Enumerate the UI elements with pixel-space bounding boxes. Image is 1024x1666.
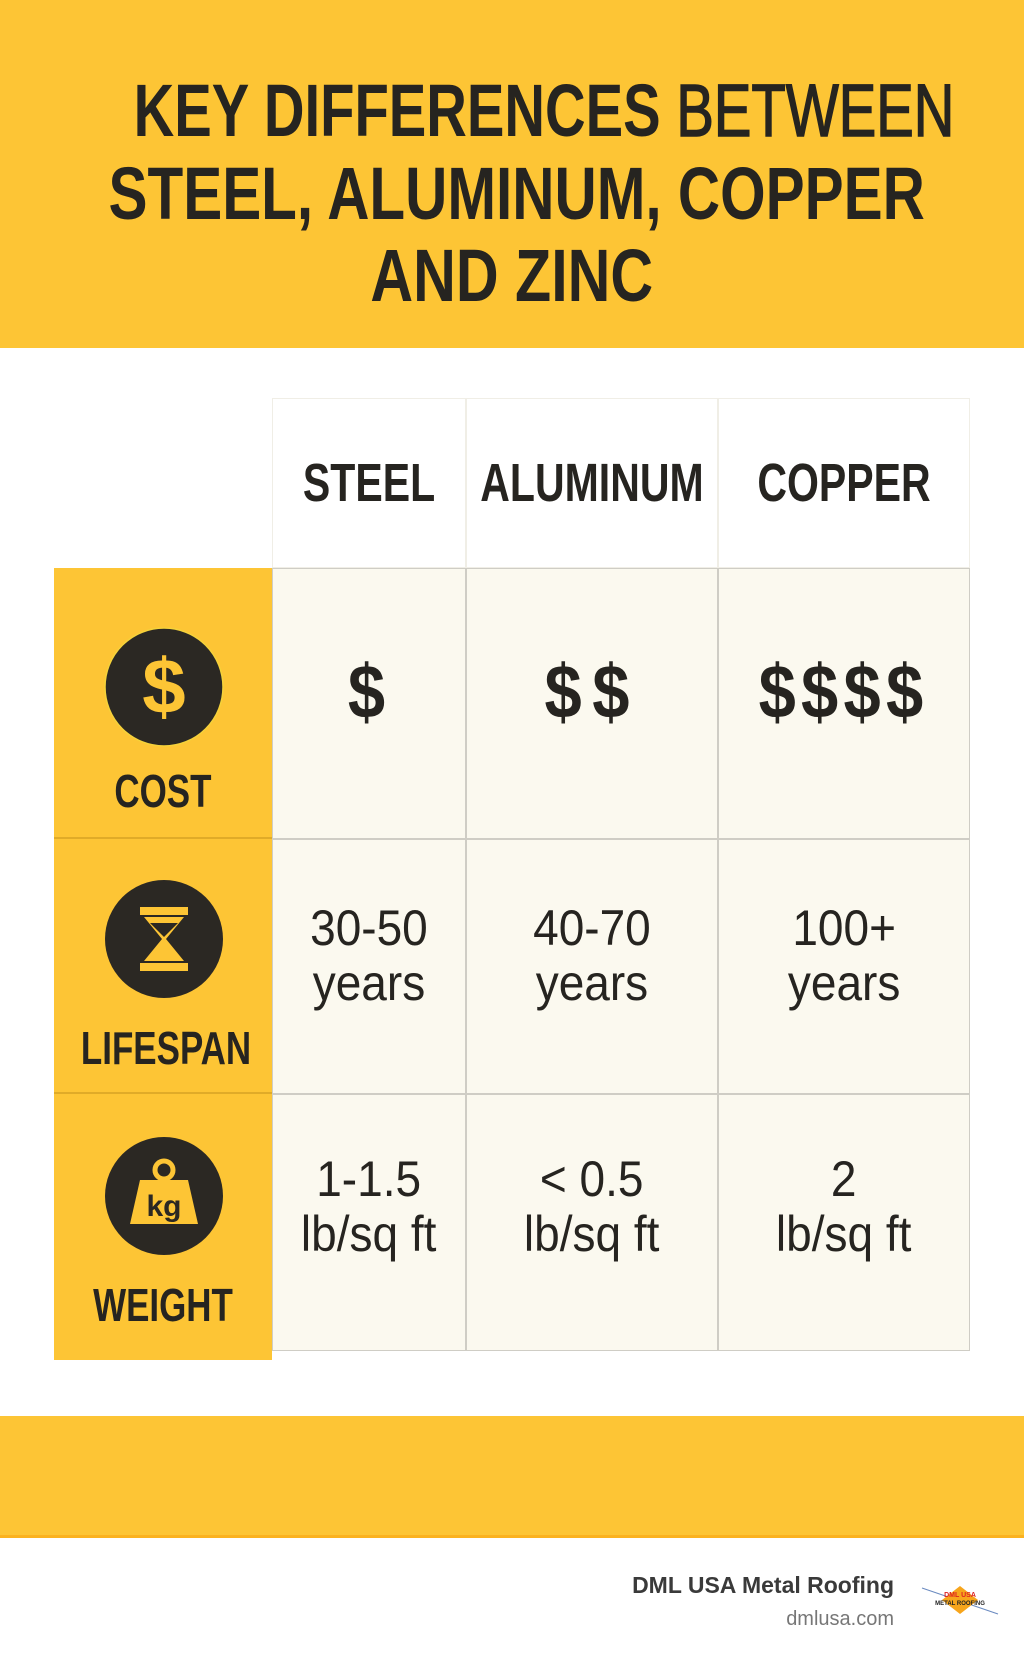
- header: copper: COPPER: [757, 453, 931, 513]
- cost: steel: [272, 568, 466, 839]
- title text: STEEL, ALUMINUM, COPPER: [108, 152, 925, 235]
- header: steel: [272, 398, 466, 568]
- lifespan: copper: years: [788, 954, 900, 1010]
- weight: copper: [718, 1094, 970, 1351]
- weight: copper: lb/sq ft: [776, 1206, 912, 1262]
- weight: steel: [272, 1094, 466, 1351]
- weight label: WEIGHT: [93, 1279, 233, 1331]
- icon: dollar: $: [142, 642, 186, 730]
- header: copper: [718, 398, 970, 568]
- icon: kg weight: kg: [146, 1190, 182, 1223]
- title banner: [0, 0, 1024, 348]
- header: steel: STEEL: [303, 453, 435, 513]
- lifespan: aluminum: [466, 839, 718, 1094]
- weight: aluminum: [466, 1094, 718, 1351]
- title text: KEY DIFFERENCES BETWEEN: [134, 69, 954, 152]
- lifespan: steel: [272, 839, 466, 1094]
- cost: aluminum: [466, 568, 718, 839]
- weight: aluminum: lb/sq ft: [524, 1206, 660, 1262]
- lifespan: aluminum: years: [536, 954, 648, 1010]
- lifespan: copper: 100+: [792, 900, 896, 956]
- cost: aluminum: $$: [544, 650, 640, 735]
- logo: METAL ROOFING: [935, 1601, 985, 1607]
- lifespan label: LIFESPAN: [81, 1022, 251, 1074]
- icon: kg weight: [105, 1137, 223, 1255]
- cost: copper: [718, 568, 970, 839]
- cost: steel: $: [348, 650, 390, 735]
- lifespan: steel: 30-50: [310, 900, 428, 956]
- label: weight: [54, 1094, 272, 1360]
- cost: copper: $$$$: [759, 650, 929, 735]
- lifespan: copper: [718, 839, 970, 1094]
- footer brand text: DML USA Metal Roofing: [632, 1572, 894, 1598]
- title text: AND ZINC: [371, 234, 653, 317]
- logo: DML USA: [944, 1592, 976, 1599]
- cost label: COST: [114, 765, 212, 817]
- icon: hourglass: [105, 880, 223, 998]
- lifespan: aluminum: 40-70: [533, 900, 651, 956]
- header: aluminum: [466, 398, 718, 568]
- bottom band: [0, 1416, 1024, 1538]
- label: cost: [54, 568, 272, 839]
- weight: aluminum: < 0.5: [540, 1150, 644, 1206]
- logo: [922, 1586, 998, 1614]
- label: lifespan: [54, 839, 272, 1094]
- footer url: dmlusa.com: [786, 1608, 894, 1630]
- weight: steel: 1-1.5: [317, 1150, 421, 1206]
- weight: steel: lb/sq ft: [301, 1206, 437, 1262]
- lifespan: steel: years: [313, 954, 425, 1010]
- title text: [108, 69, 954, 317]
- weight: copper: 2: [831, 1150, 857, 1206]
- header: aluminum: ALUMINUM: [480, 453, 704, 513]
- icon: dollar: [104, 628, 224, 746]
